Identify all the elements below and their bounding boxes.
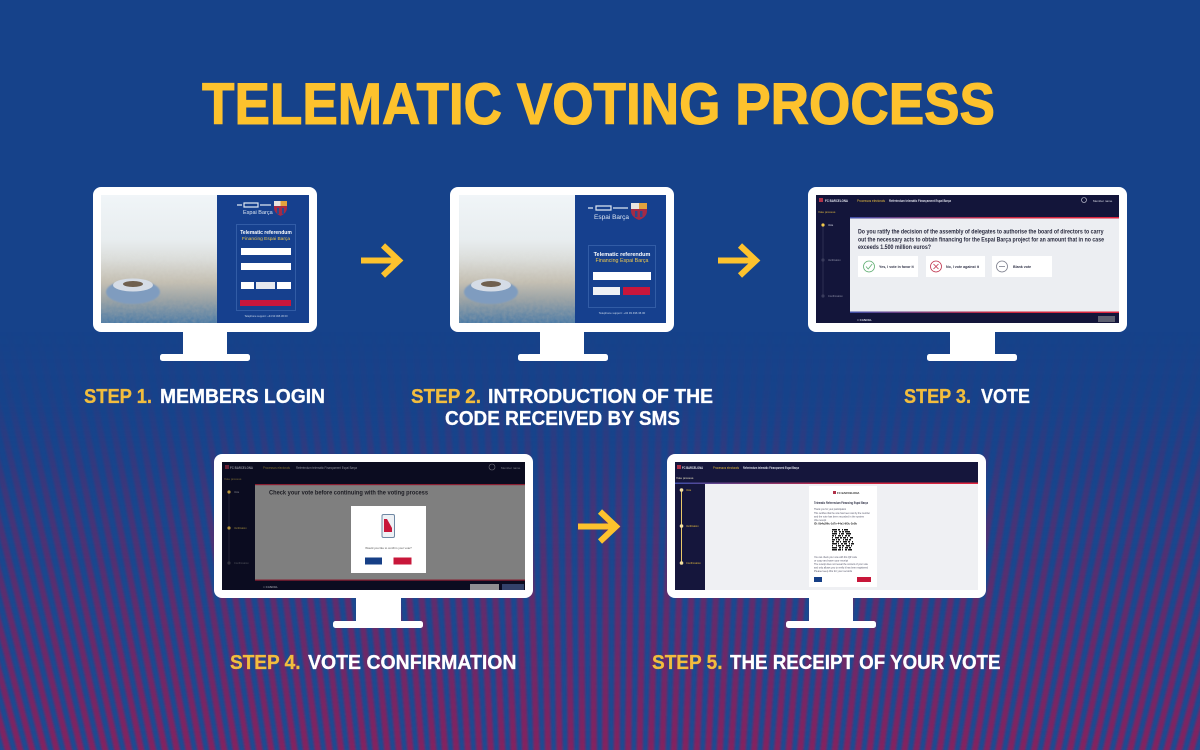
question area — [850, 217, 1119, 313]
option: no — [926, 256, 985, 277]
step 4 label: VOTE CONFIRMATION — [308, 651, 516, 674]
app header: Referèndum telemàtic Finançament Espai Barça — [296, 466, 357, 470]
monitor: step 1 members login — [93, 187, 317, 361]
question text — [858, 228, 1104, 251]
monitor frame — [808, 187, 1127, 361]
app header: FC BARCELONA — [682, 466, 703, 470]
footer controls — [857, 316, 1115, 322]
progress sidebar: Verification — [828, 258, 841, 262]
footer controls: < CANCEL — [857, 318, 872, 322]
stadium photo — [101, 195, 217, 323]
step 1 label: STEP 1. — [84, 385, 152, 408]
form subheading: Financing Espai Barça — [242, 236, 290, 242]
receipt details: ID: 8b4a2f6c-1d7e-44a1-9f3c-2e5b — [814, 522, 858, 526]
question text: out the necessary acts to obtain financing for the Espai Barça project for an amount that in no case — [858, 236, 1104, 243]
step 2 label: INTRODUCTION OF THE — [488, 385, 713, 408]
footer controls: < CANCEL — [263, 585, 278, 589]
step 5 label: STEP 5. — [652, 651, 722, 674]
receipt details: Vote receipt — [814, 519, 826, 522]
receipt details: and the vote has been recorded in the system — [814, 516, 864, 518]
question text: exceeds 1.500 million euros? — [858, 244, 931, 251]
content area — [675, 482, 978, 590]
option: no: No, I vote against it — [946, 265, 980, 269]
progress sidebar: Confirmation — [686, 561, 701, 565]
Espai Barça logo: Espai Barça — [243, 210, 274, 216]
app header: Member name — [1093, 199, 1113, 203]
arrow: step 4 to step 5 — [578, 512, 616, 542]
app header: Processos electorals — [713, 466, 739, 470]
monitor frame — [450, 187, 674, 361]
icon: QR code — [832, 530, 854, 550]
app header: Vote process — [224, 477, 242, 481]
app header: Vote process — [818, 210, 836, 214]
monitor frame — [214, 454, 533, 628]
receipt details — [814, 508, 870, 526]
app header: Member name — [501, 466, 521, 470]
help line: Telephone support: +34 93 496 36 00 — [599, 311, 646, 315]
app header: Referèndum telemàtic Finançament Espai Barça — [889, 199, 951, 203]
step 3 label: VOTE — [981, 385, 1030, 408]
receipt notes: or copy and save your receipt — [814, 560, 848, 562]
check vote heading: Check your vote before continuing with the voting process — [269, 490, 428, 496]
app background — [222, 462, 525, 590]
progress sidebar — [821, 223, 843, 298]
app header: Referèndum telemàtic Finançament Espai Barça — [743, 466, 799, 470]
app header: Vote process — [676, 476, 694, 480]
receipt notes: Please keep this for your records — [814, 570, 853, 573]
title: TELEMATIC VOTING PROCESS — [202, 72, 995, 137]
app header: Processos electorals — [857, 199, 885, 203]
code input — [593, 272, 651, 280]
receipt notes: You can check your vote with this QR code — [814, 556, 858, 559]
progress sidebar: Verification — [686, 524, 699, 528]
cancel button — [593, 287, 620, 295]
modal question: Would you like to confirm your vote? — [365, 546, 412, 550]
step 5 label: THE RECEIPT OF YOUR VOTE — [730, 651, 1000, 674]
monitor frame — [93, 187, 317, 361]
exit button — [814, 577, 822, 582]
arrow: step 2 to step 3 — [718, 246, 756, 276]
validate button — [623, 287, 650, 295]
sms panel — [575, 195, 666, 323]
question text: Do you ratify the decision of the assembly of delegates to authorise the board of directors to carry — [858, 228, 1104, 236]
step 2 label: STEP 2. — [411, 385, 481, 408]
app header — [676, 465, 799, 480]
step 3 label: STEP 3. — [904, 385, 971, 408]
receipt heading: Telematic Referendum Financing Espai Barça — [814, 501, 869, 505]
progress sidebar: Vote — [686, 488, 692, 492]
monitor: step 3 vote — [808, 187, 1127, 361]
option: yes: Yes, I vote in favor it — [879, 265, 915, 269]
receipt notes: The receipt does not reveal the content of your vote — [814, 563, 869, 566]
step 4 label: STEP 4. — [230, 651, 300, 674]
step 1 label — [84, 385, 325, 408]
progress sidebar — [227, 490, 249, 565]
app header — [224, 464, 521, 481]
monitor frame — [667, 454, 986, 628]
app header: Processos electorals — [263, 466, 290, 470]
form box — [588, 246, 656, 308]
dimmed content area — [255, 484, 525, 581]
arrow: step 1 to step 2 — [361, 246, 399, 276]
monitor: step 2 sms code — [450, 187, 674, 361]
Espai Barça logo: Espai Barça — [594, 214, 629, 221]
app header — [818, 198, 1113, 214]
option: blank — [992, 256, 1052, 277]
option: yes — [858, 256, 918, 277]
input fields — [241, 248, 291, 289]
monitor: step 5 receipt — [667, 454, 986, 628]
icon: phone — [382, 514, 394, 538]
app header: FC BARCELONA — [230, 466, 253, 470]
confirm button — [394, 558, 412, 564]
step 2 label — [411, 385, 713, 430]
app background — [816, 195, 1119, 323]
app header: FC BARCELONA — [825, 199, 848, 203]
progress sidebar — [680, 488, 701, 565]
progress sidebar: Vote — [234, 490, 240, 494]
app background — [675, 462, 978, 590]
monitor: step 4 vote confirmation — [214, 454, 533, 628]
step 3 label — [904, 385, 1030, 408]
stadium photo — [459, 195, 575, 323]
receipt notes: and only allows you to verify it has been registered — [814, 566, 869, 570]
progress sidebar: Vote — [828, 223, 834, 227]
receipt notes — [814, 556, 869, 573]
receipt logo: FC BARCELONA — [837, 491, 859, 495]
receipt details: Thank you for your participation — [814, 508, 847, 511]
option: blank: Blank vote — [1013, 265, 1031, 269]
confirmation modal — [351, 506, 426, 573]
form subheading: Financing Espai Barça — [596, 258, 649, 264]
footer controls — [263, 584, 524, 590]
cancel button — [365, 558, 382, 564]
progress sidebar: Verification — [234, 526, 247, 530]
progress sidebar: Confirmation — [234, 561, 249, 565]
form heading: Telematic referendum — [594, 252, 650, 258]
progress sidebar: Confirmation — [828, 294, 843, 298]
step 2 label: CODE RECEIVED BY SMS — [445, 407, 680, 430]
step 1 label: MEMBERS LOGIN — [160, 385, 325, 408]
form heading: Telematic referendum — [240, 230, 292, 236]
receipt card — [809, 486, 877, 587]
login panel — [217, 195, 309, 323]
download button — [857, 577, 871, 582]
enter button — [240, 300, 291, 306]
help line: Telephone support: +34 93 496 36 00 — [244, 314, 288, 318]
form box — [236, 224, 296, 310]
receipt details: This certifies that the vote has been cast by the member — [814, 512, 870, 515]
